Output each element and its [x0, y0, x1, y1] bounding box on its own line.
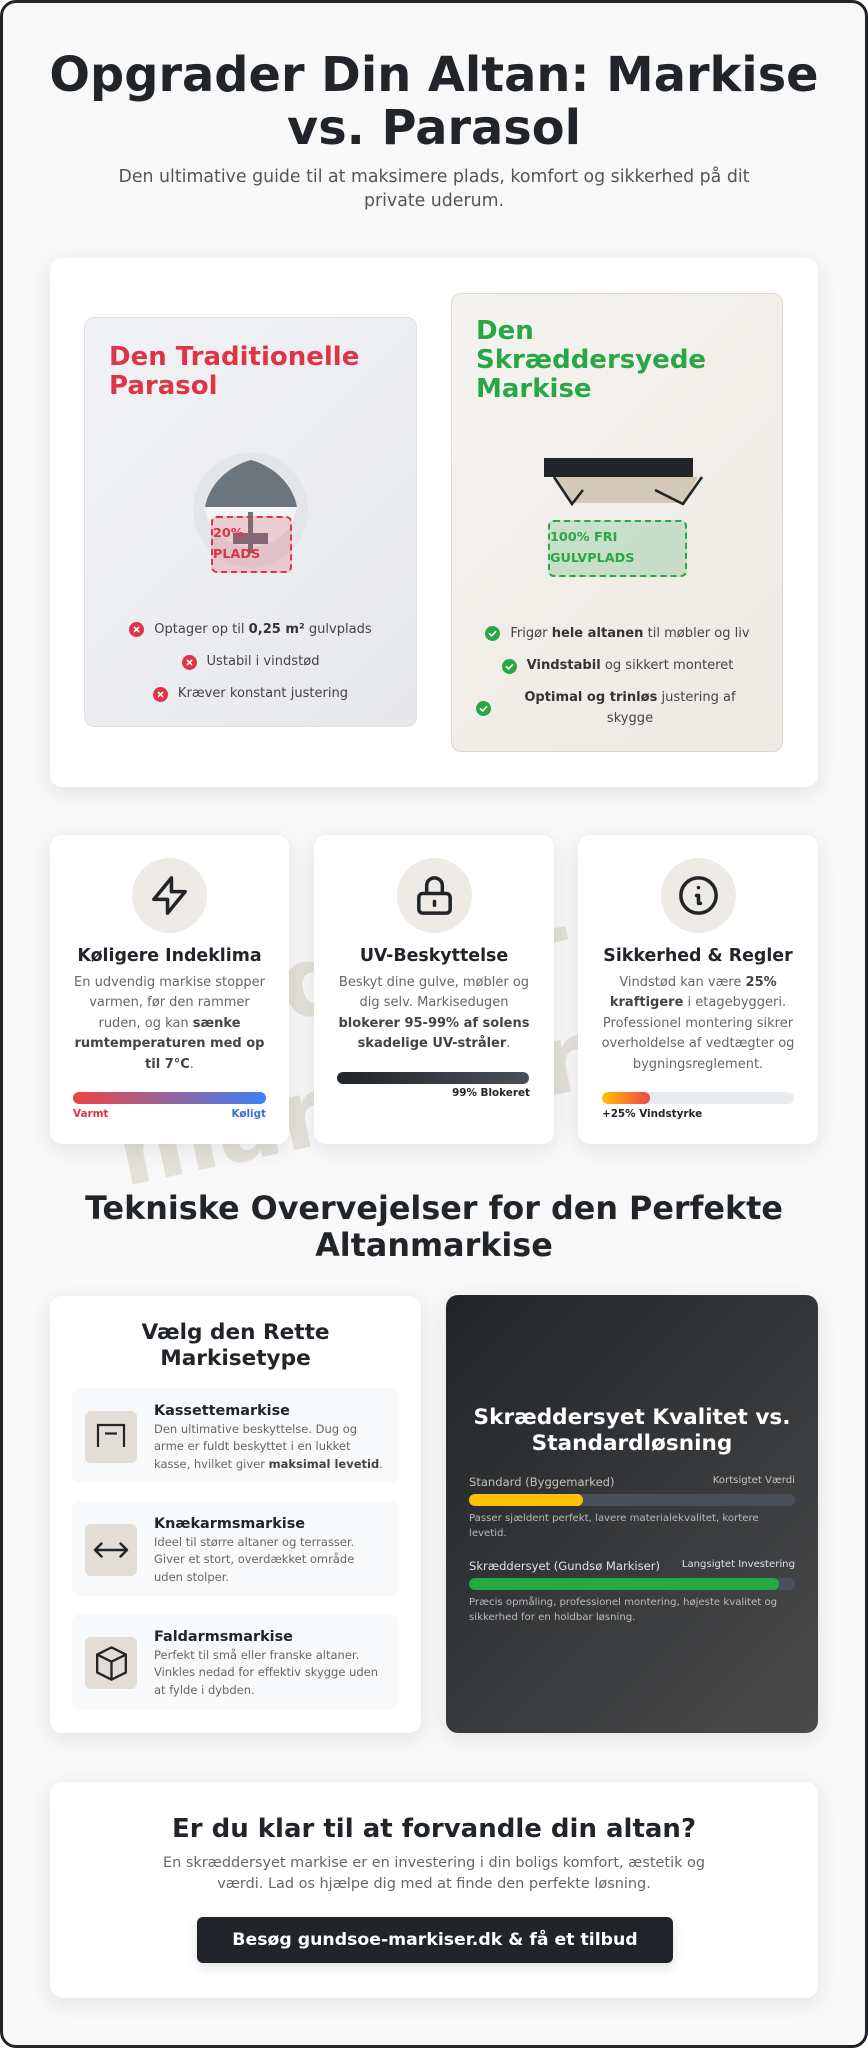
description: uden stolper.: [154, 1570, 229, 1584]
drawback: Kræver konstant justering: [178, 686, 348, 701]
parasol heading: Den Traditionelle: [109, 342, 359, 372]
text: Beskyt dine gulve, møbler og: [339, 975, 529, 990]
illustration: parasol: [193, 452, 308, 573]
panel: markisetyper: [50, 1296, 421, 1733]
heading: UV-Beskyttelse: [360, 946, 508, 966]
watermark text: markiser: [106, 999, 598, 1208]
heading: Køligere Indeklima: [77, 946, 262, 966]
label: standard: Standard (Byggemarked): [469, 1475, 615, 1489]
panel: kvalitet sammenligning: [446, 1295, 818, 1733]
icon: lock: [396, 858, 472, 933]
benefit: [476, 690, 736, 726]
markise benefits list: [476, 626, 750, 726]
cta text: [163, 1855, 705, 1892]
text: Professionel montering sikrer: [603, 1016, 793, 1031]
heading: Vælg den Rette: [141, 1320, 330, 1344]
markise heading: Skræddersyede: [476, 345, 706, 375]
description: Ideel til større altaner og terrasser.: [154, 1535, 354, 1549]
name: Faldarmsmarkise: [154, 1629, 293, 1645]
card: markise: [451, 293, 783, 752]
name: Kassettemarkise: [154, 1403, 290, 1419]
panel: comparison: [50, 258, 818, 787]
zone: 20% plads: [211, 516, 292, 573]
benefit: skygge: [607, 711, 653, 726]
illustration: markise: [544, 458, 703, 577]
markise heading: [476, 316, 706, 404]
description: Giver et stort, overdækket område: [154, 1552, 354, 1566]
section heading: [85, 1190, 783, 1264]
row: kassettemarkise: [72, 1388, 398, 1483]
text: [74, 975, 265, 1072]
zone: fri gulvplads: 100% FRI: [550, 530, 617, 545]
row: faldarmsmarkise: [72, 1614, 398, 1709]
label: 99% blokeret: 99% Blokeret: [452, 1087, 530, 1099]
parasol heading: [109, 342, 359, 400]
zone: 20% plads: PLADS: [213, 546, 260, 562]
label: skræddersyet: Skræddersyet (Gundsø Markiser): [469, 1559, 660, 1573]
description: standard: Passer sjældent perfekt, lavere materialekvalitet, kortere: [469, 1513, 759, 1524]
markise heading: Markise: [476, 374, 592, 404]
description: Vinkles nedad for effektiv skygge uden: [154, 1665, 378, 1679]
text: En udvendig markise stopper: [74, 975, 265, 990]
bar: skræddersyet: [469, 1578, 795, 1590]
description: skræddersyet: sikkerhed for en holdbar løsning.: [469, 1612, 635, 1622]
zone: 20% plads: 20%: [213, 526, 244, 541]
section heading: Altanmarkise: [315, 1227, 553, 1264]
cta button: [197, 1917, 673, 1963]
description: Perfekt til små eller franske altaner.: [154, 1648, 359, 1662]
text: Vindstød kan være 25%: [619, 975, 777, 990]
icon: info: [660, 858, 736, 933]
label: langsigtet: Langsigtet Investering: [682, 1559, 795, 1570]
panel: uv-beskyttelse: [314, 835, 554, 1144]
description: skræddersyet: Præcis opmåling, professionel montering, højeste kvalitet og: [469, 1597, 777, 1608]
text: [338, 975, 530, 1051]
subtitle: private uderum.: [364, 191, 504, 211]
drawback: Ustabil i vindstød: [206, 654, 319, 669]
text: [602, 975, 794, 1072]
bar: standard: [469, 1494, 795, 1506]
cta text: En skræddersyet markise er en investering i din boligs komfort, æstetik og: [163, 1855, 705, 1871]
temperature bar: [73, 1092, 266, 1104]
icon: arrows: [85, 1524, 137, 1576]
panel: køligere indeklima: [50, 835, 289, 1144]
description: Den ultimative beskyttelse. Dug og: [154, 1422, 357, 1436]
drawback: Optager op til 0,25 m² gulvplads: [154, 622, 372, 636]
title: Opgrader Din Altan: Markise: [49, 48, 819, 103]
description: kasse, hvilket giver maksimal levetid.: [154, 1457, 383, 1471]
section heading: Tekniske Overvejelser for den Perfekte: [85, 1190, 783, 1226]
description: standard: [469, 1513, 759, 1538]
heading: Skræddersyet Kvalitet vs.: [474, 1404, 790, 1430]
icon: kassette: [85, 1411, 137, 1463]
uv bar: [337, 1072, 529, 1084]
parasol drawbacks list: [129, 622, 372, 702]
panel: call to action: [50, 1782, 818, 1998]
text: dig selv. Markisedugen: [360, 995, 508, 1010]
text: skadelige UV-stråler.: [358, 1036, 510, 1051]
text: varmen, før den rammer: [89, 995, 250, 1010]
label: varmt: Varmt: [73, 1108, 108, 1120]
heading: Sikkerhed & Regler: [603, 946, 793, 966]
subtitle: Den ultimative guide til at maksimere plads, komfort og sikkerhed på dit: [119, 167, 749, 187]
description: at fylde i dybden.: [154, 1683, 255, 1697]
icon: bolt: [132, 858, 207, 933]
title: vs. Parasol: [287, 101, 581, 156]
watermark text: gundsoe-: [68, 872, 582, 1085]
text: ruden, og kan sænke: [98, 1016, 241, 1031]
wind bar: [602, 1092, 794, 1104]
icon: cube: [85, 1637, 137, 1689]
description: skræddersyet: [469, 1596, 777, 1622]
description: arme er fuldt beskyttet i en lukket: [154, 1439, 350, 1453]
text: blokerer 95-99% af solens: [338, 1016, 530, 1031]
heading: [474, 1404, 790, 1456]
description: [154, 1648, 378, 1697]
heading: Standardløsning: [532, 1430, 732, 1456]
text: bygningsreglement.: [633, 1057, 763, 1072]
text: rumtemperaturen med op: [74, 1036, 264, 1051]
cta text: værdi. Lad os hjælpe dig med at finde den perfekte løsning.: [217, 1876, 651, 1892]
zone: fri gulvplads: [548, 520, 687, 577]
text: overholdelse af vedtægter og: [602, 1036, 794, 1051]
benefit: Optimal og trinløs justering af: [524, 690, 736, 705]
description: [154, 1422, 383, 1471]
benefit: Frigør hele altanen til møbler og liv: [510, 626, 750, 640]
card: parasol: [84, 317, 417, 727]
parasol heading: Parasol: [109, 370, 218, 400]
text: kraftigere i etagebyggeri.: [610, 995, 786, 1010]
heading: [141, 1320, 330, 1370]
row: knækarmsmarkise: [72, 1501, 398, 1596]
cta button: Besøg gundsoe-markiser.dk & få et tilbud: [232, 1930, 638, 1950]
markise heading: Den: [476, 316, 534, 346]
title: [49, 48, 819, 156]
heading: Markisetype: [160, 1346, 311, 1370]
benefit: Vindstabil og sikkert monteret: [527, 658, 733, 673]
label: køligt: Køligt: [231, 1108, 266, 1120]
zone: fri gulvplads: GULVPLADS: [550, 550, 634, 566]
text: til 7°C.: [145, 1057, 194, 1072]
subtitle: [119, 166, 749, 211]
description: standard: levetid.: [469, 1528, 507, 1538]
panel: sikkerhed og regler: [578, 835, 818, 1144]
name: Knækarmsmarkise: [154, 1516, 305, 1532]
label: vindstyrke: +25% Vindstyrke: [602, 1108, 702, 1120]
description: [154, 1535, 354, 1584]
cta heading: Er du klar til at forvandle din altan?: [172, 1814, 696, 1844]
label: kortsigtet: Kortsigtet Værdi: [713, 1475, 795, 1486]
